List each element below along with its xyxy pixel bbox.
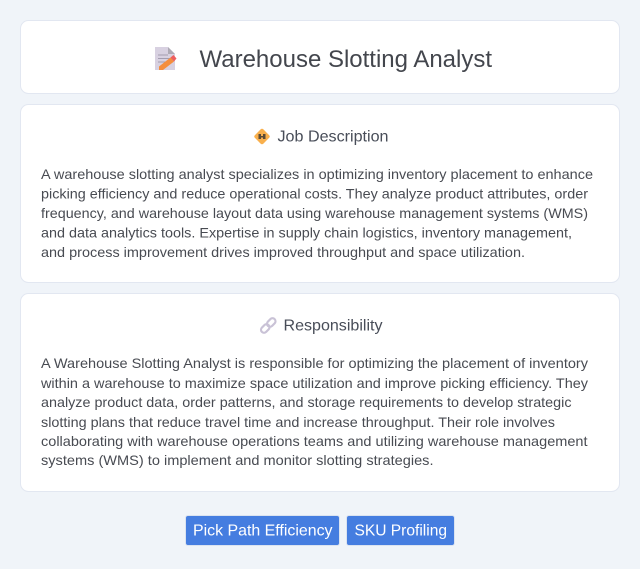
text block: job description (41, 166, 593, 260)
icon: chain link (260, 317, 277, 334)
text block: responsibility: systems (WMS) to implement and monitor slotting strategies. (41, 452, 434, 468)
heading: title text: Warehouse Slotting Analyst (200, 46, 492, 73)
text block: responsibility (40, 355, 588, 468)
text block: responsibility: A Warehouse Slotting Analyst is responsible for optimizing the placement of inventory (41, 355, 588, 371)
panel: title (20, 20, 620, 94)
text block: job description: and data analytics tools. Expertise in supply chain logistics, inventory management, (41, 224, 572, 240)
text block: responsibility: analyze product data, order patterns, and storage requirements to develop strategic (41, 394, 572, 410)
icon: document with pencil (155, 47, 176, 70)
heading: responsibility: Responsibility (284, 318, 382, 334)
panel: responsibility (20, 294, 620, 492)
text block: job description: and process improvement drives improved throughput and space utilization. (41, 244, 525, 260)
tag: sku profiling: SKU Profiling (354, 522, 447, 540)
text block: responsibility: slotting plans that reduce travel time and increase throughput. Their role involves (41, 414, 555, 430)
text block: job description: picking efficiency and reduce operational costs. They analyze product attributes, order (41, 186, 588, 202)
heading: job description: Job Description (278, 129, 388, 146)
text block: job description: A warehouse slotting analyst specializes in optimizing inventory placement to enhance (41, 166, 593, 182)
tag: sku profiling (346, 516, 454, 546)
icon: orange diamond (254, 128, 270, 145)
text block: responsibility: within a warehouse to maximize space utilization and improve picking efficiency. They (40, 375, 588, 391)
text block: job description: frequency, and warehouse layout data using warehouse management systems (WMS) (41, 205, 588, 221)
text block: responsibility: collaborating with warehouse operations teams and utilizing warehouse management (41, 433, 588, 449)
tag: pick path efficiency: Pick Path Efficiency (193, 522, 332, 540)
panel: job description (20, 104, 620, 282)
tag: pick path efficiency (186, 516, 340, 546)
